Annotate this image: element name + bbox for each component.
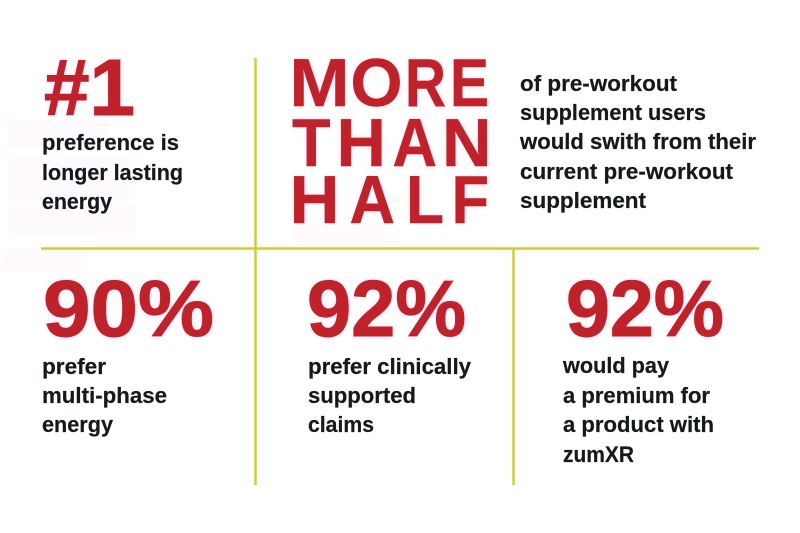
text: premium description: would pay <box>562 353 670 378</box>
heading: MORE THAN HALF: L <box>406 162 444 238</box>
text: premium description: a product with <box>563 412 714 437</box>
text: preference description: energy <box>42 189 113 214</box>
text: switching description: supplement <box>520 188 647 213</box>
text: switching description <box>519 71 756 213</box>
number: 90%: 90% <box>43 264 214 353</box>
text: premium description: a premium for <box>563 383 710 408</box>
heading: MORE THAN HALF: A <box>350 162 395 238</box>
text: premium description: zumXR <box>563 442 634 467</box>
heading: MORE THAN HALF: H <box>336 105 386 181</box>
stat: 90% multi-phase <box>42 264 214 437</box>
heading: MORE THAN HALF <box>290 45 492 238</box>
stat: more than half <box>290 45 756 238</box>
text: switching description: supplement users <box>520 100 706 125</box>
heading: MORE THAN HALF: H <box>290 162 340 238</box>
text: preference description: preference is <box>42 130 179 155</box>
heading: MORE THAN HALF: E <box>450 45 489 121</box>
text: clinical claims description <box>308 354 472 437</box>
text: clinical claims description: claims <box>308 412 374 437</box>
number: 92%: 92% <box>307 264 466 353</box>
stat: #1 preference <box>42 43 183 214</box>
heading: MORE THAN HALF: O <box>350 45 402 121</box>
number: #1: #1 <box>44 43 135 132</box>
text: clinical claims description: supported <box>308 383 416 408</box>
text: preference description <box>42 130 183 214</box>
text: switching description: of pre-workout <box>520 71 678 96</box>
heading: MORE THAN HALF: F <box>452 162 489 238</box>
text: multi-phase description <box>42 354 167 437</box>
text: multi-phase description: multi-phase <box>42 383 167 408</box>
heading: MORE THAN HALF: A <box>392 105 437 181</box>
text: clinical claims description: prefer clinically <box>308 354 472 379</box>
stat: 92% premium <box>562 264 724 467</box>
heading: MORE THAN HALF: N <box>442 105 492 181</box>
heading: MORE THAN HALF: T <box>292 105 330 181</box>
text: switching description: current pre-workout <box>520 159 734 184</box>
text: preference description: longer lasting <box>42 160 183 185</box>
number: 92%: 92% <box>566 264 724 353</box>
text: multi-phase description: energy <box>42 412 114 437</box>
text: multi-phase description: prefer <box>42 354 106 379</box>
text: switching description: would swith from their <box>519 129 756 154</box>
heading: MORE THAN HALF: M <box>290 45 350 121</box>
stat: 92% clinical claims <box>307 264 472 437</box>
text: premium description <box>562 353 714 467</box>
heading: MORE THAN HALF: R <box>405 45 446 121</box>
